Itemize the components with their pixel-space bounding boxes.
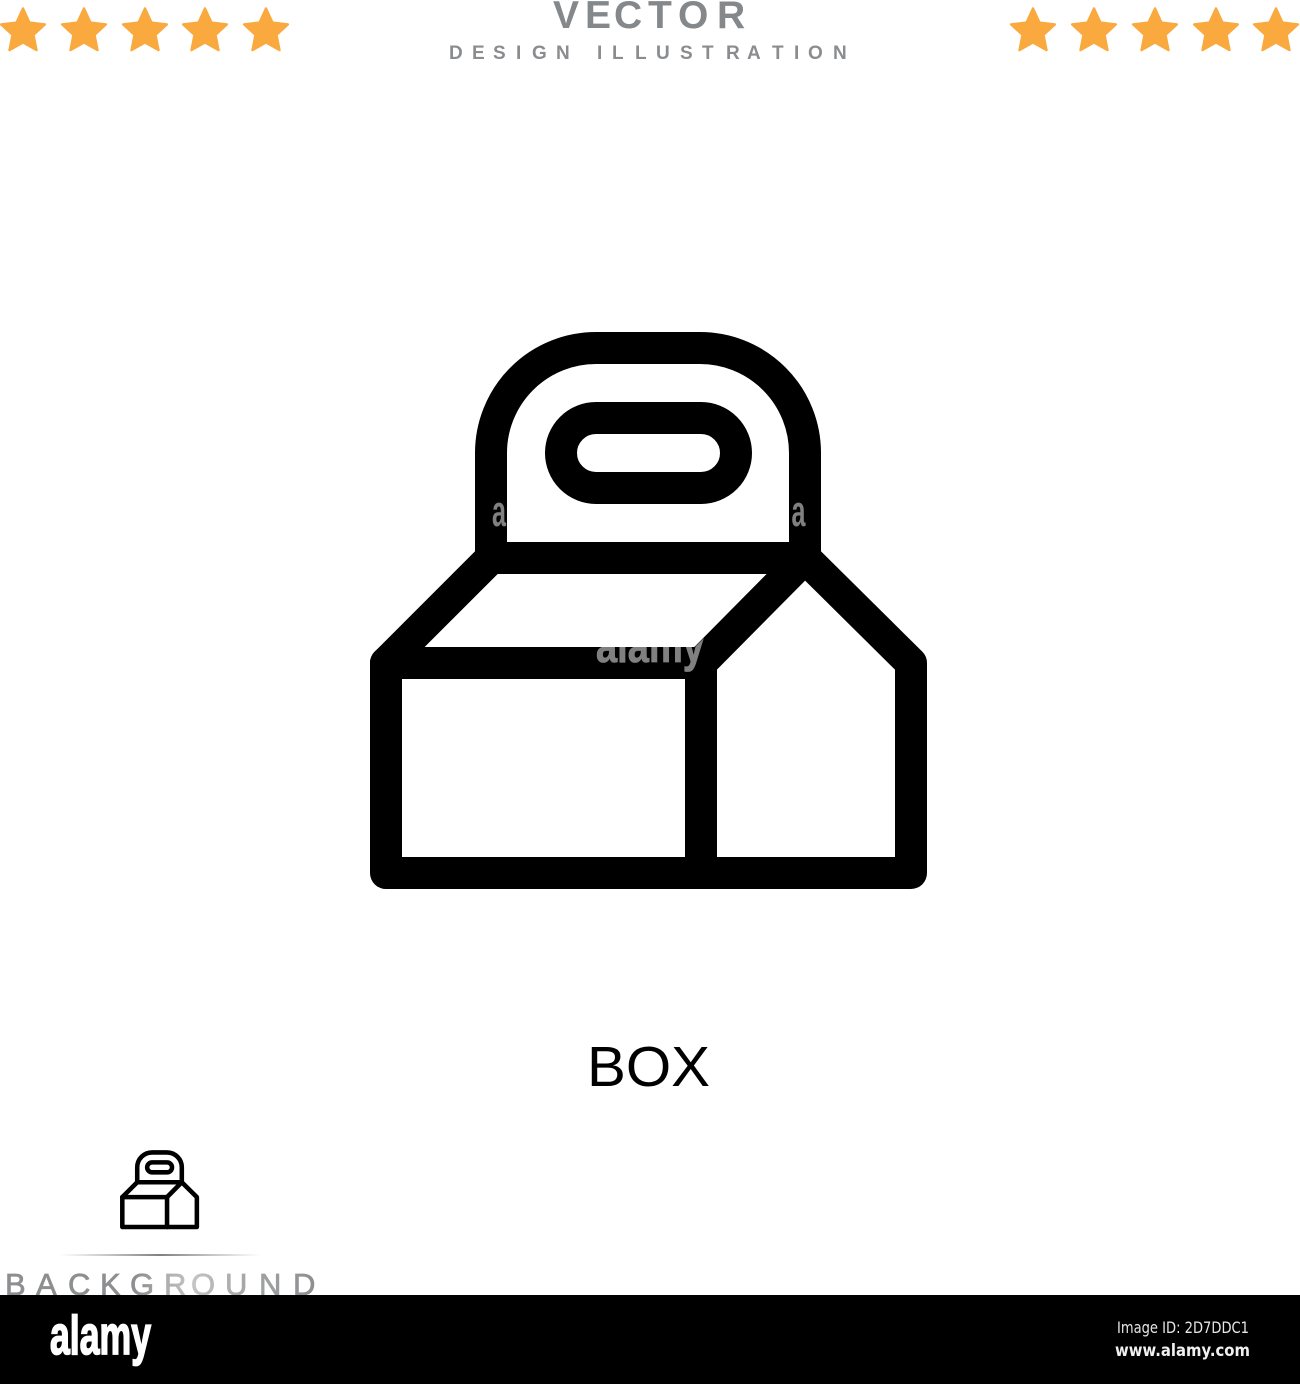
watermark: fragment right: a bbox=[792, 487, 806, 536]
left star rating bbox=[1, 8, 288, 50]
footer logo: alamy: alamy bbox=[50, 1304, 151, 1366]
footer bar bbox=[0, 1295, 1300, 1384]
watermark: fragment left: a bbox=[492, 487, 506, 536]
watermark: alamy fragment: alamy bbox=[596, 620, 704, 672]
small icon: carrier box bbox=[122, 1152, 197, 1227]
label: background: BACKGROUND bbox=[5, 1267, 315, 1302]
main icon: carrier box bbox=[386, 348, 911, 873]
divider rule bbox=[60, 1254, 260, 1256]
right star rating bbox=[1011, 8, 1298, 50]
footer image id: Image ID: 2D7DDC1 bbox=[1117, 1318, 1249, 1337]
subheading: design illustration: DESIGN ILLUSTRATION bbox=[449, 43, 847, 64]
footer website: www.alamy.com bbox=[1115, 1341, 1250, 1361]
icon title: box: BOX bbox=[587, 1035, 710, 1099]
